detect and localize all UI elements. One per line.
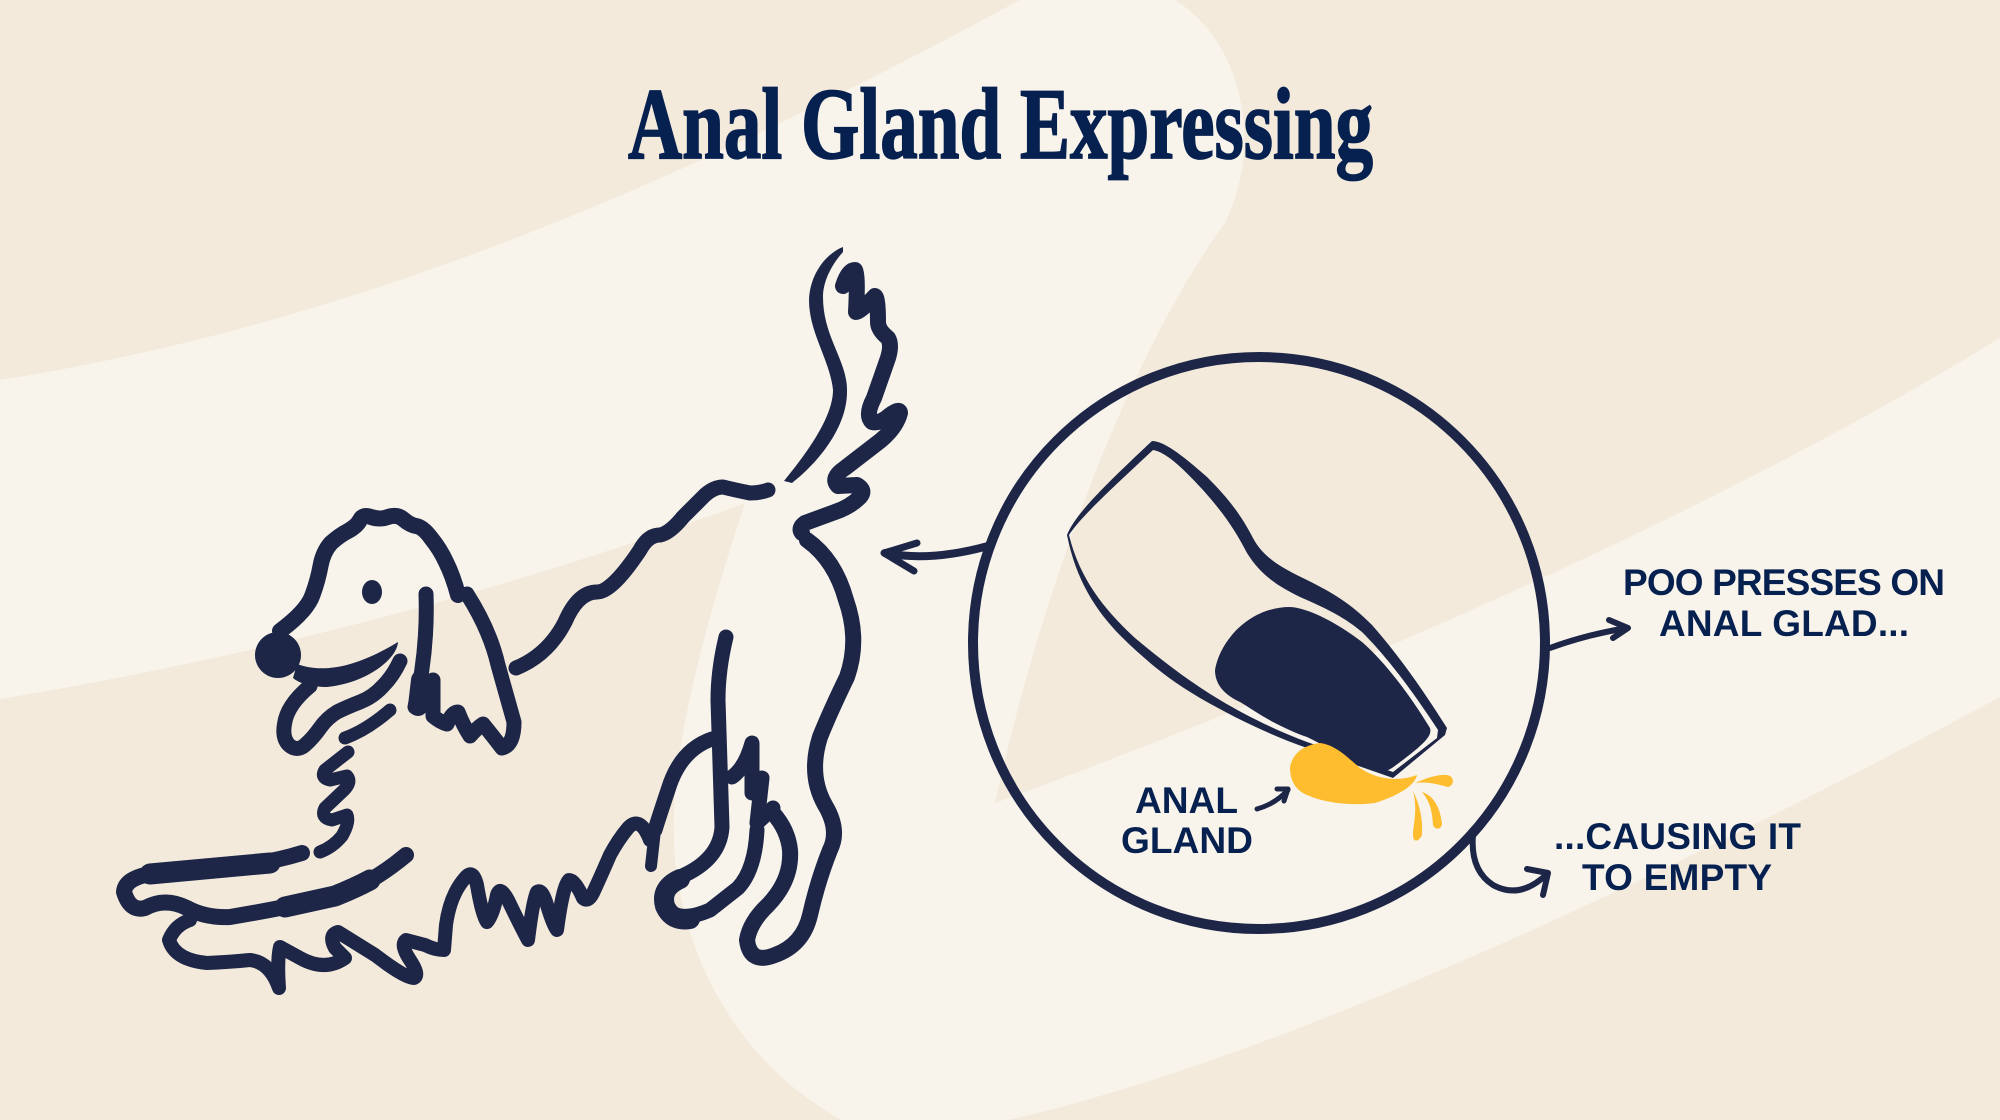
label: poo presses: ANAL GLAD...	[1659, 603, 1909, 644]
rectum outline	[1067, 441, 1447, 778]
dog chin	[345, 710, 390, 738]
label: causing it to empty: TO EMPTY	[1582, 857, 1772, 898]
magnified circle	[973, 357, 1545, 929]
dog neck fur	[320, 752, 349, 852]
label: anal gland: ANAL	[1135, 780, 1238, 821]
arrow: to gland	[1257, 789, 1288, 809]
arrow: causing it to empty	[1473, 835, 1548, 895]
dog inner leg	[664, 637, 773, 919]
dog belly	[651, 739, 712, 866]
label: poo presses: POO PRESSES ON	[1623, 562, 1945, 603]
dog back leg	[747, 540, 853, 958]
label: anal gland: GLAND	[1121, 820, 1253, 861]
dog back line	[516, 487, 768, 668]
gland droplets	[1413, 775, 1453, 841]
dog tongue	[284, 661, 400, 748]
label: anal gland	[1121, 780, 1253, 861]
anal gland	[1290, 743, 1417, 804]
dog eye	[362, 580, 382, 604]
dog front paw	[124, 853, 406, 917]
dog mouth	[293, 642, 398, 687]
poo	[1215, 607, 1430, 771]
arrow: circle to dog	[884, 543, 988, 571]
label: causing it to empty	[1554, 816, 1801, 898]
illustration: dog line drawing	[124, 247, 900, 988]
title: Anal Gland Expressing	[628, 68, 1373, 181]
label: poo presses	[1623, 562, 1945, 644]
dog underside fur	[169, 824, 650, 988]
arrow: poo presses	[1550, 620, 1628, 648]
dog ear	[415, 594, 514, 748]
dog head outline	[280, 516, 458, 631]
dog tail	[784, 247, 900, 533]
label: causing it to empty: ...CAUSING IT	[1554, 816, 1801, 857]
dog nose	[255, 632, 301, 678]
